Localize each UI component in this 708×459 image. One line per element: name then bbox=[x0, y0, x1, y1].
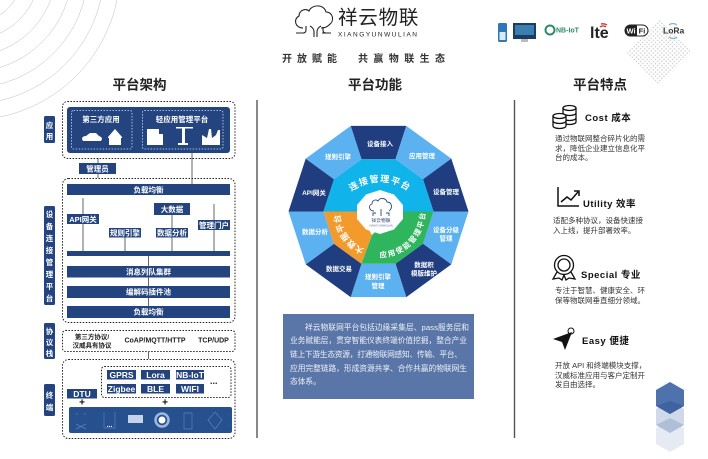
sector labels: API网关 bbox=[302, 188, 326, 197]
curved label: big data platform: 大数据平台 bbox=[333, 216, 364, 254]
admin tag bbox=[79, 163, 116, 174]
icon: phone bbox=[498, 23, 507, 42]
chart: function wheel bbox=[288, 126, 468, 298]
icon: line chart bbox=[558, 187, 579, 206]
sector labels: 规则引擎 bbox=[325, 152, 352, 161]
label: device management platform: 备 bbox=[46, 221, 54, 231]
curved label: connection platform: 连接管理平台 bbox=[348, 174, 410, 192]
label: protocol stack: 议 bbox=[46, 337, 54, 347]
load balancing lower: 负载均衡 bbox=[134, 306, 164, 316]
bus bar bbox=[67, 251, 230, 256]
center logo bbox=[357, 190, 403, 234]
tagline: 开放赋能 bbox=[282, 52, 342, 65]
segment: connection platform bbox=[324, 159, 434, 212]
title: Special 专业 bbox=[581, 269, 641, 281]
logo name: 祥云物联 bbox=[338, 7, 419, 29]
icon: factory bbox=[202, 129, 220, 145]
third-party protocols: 第三方协议/ bbox=[75, 332, 109, 341]
big data bbox=[154, 203, 190, 215]
tagline part two: 共赢物联生态 bbox=[358, 52, 450, 65]
GPRS: GPRS bbox=[109, 370, 134, 380]
plus right: + bbox=[162, 398, 168, 408]
message queue bbox=[67, 266, 230, 278]
text block: platform description: 祥云物联网平台包括边缘采集层、pass服务层和 bbox=[305, 322, 469, 332]
ellipsis: ... bbox=[210, 376, 218, 386]
WIFI bbox=[176, 384, 204, 394]
load balancing lower bbox=[67, 306, 230, 318]
sector labels: 应用管理 bbox=[409, 151, 436, 160]
third party applications: 第三方应用 bbox=[82, 114, 120, 124]
center logo: XIANGYUNWULIAN bbox=[369, 224, 393, 228]
text block: platform description: 链上下游生态资源，打通物联网感知、传输、平台、 bbox=[290, 349, 462, 359]
body: 适配多种协议，设备快速接 bbox=[553, 215, 643, 225]
api gateway: API网关 bbox=[69, 214, 97, 224]
admin tag: 管理员 bbox=[86, 164, 109, 174]
label: terminal: 端 bbox=[46, 402, 54, 412]
sector labels: 设备接入 bbox=[367, 139, 394, 148]
panel: cost bbox=[553, 106, 645, 162]
label: device management platform: 平 bbox=[46, 282, 54, 291]
body: 专注于智慧、健康安全、环 bbox=[555, 285, 645, 295]
body: 台的成本。 bbox=[555, 152, 592, 162]
icon: WiFi bbox=[625, 25, 648, 36]
label: application: 用 bbox=[46, 132, 53, 141]
coap protocols: CoAP/MQTT/HTTP bbox=[124, 338, 186, 344]
rule engine: 规则引擎 bbox=[110, 228, 140, 238]
DTU: DTU bbox=[73, 389, 91, 399]
text block: platform description: 业务赋能层，贯穿智能仪表终端价值挖掘，整合产业 bbox=[290, 335, 467, 345]
panel: device platform bbox=[62, 178, 235, 322]
sector labels bbox=[302, 139, 460, 290]
light application platform bbox=[142, 110, 223, 149]
icon: LoRa bbox=[663, 23, 685, 39]
label: device management platform: 管 bbox=[46, 257, 54, 267]
light application platform: 轻应用管理平台 bbox=[156, 114, 209, 124]
icon: WiFi: Wi bbox=[626, 26, 636, 36]
icon: award bbox=[553, 256, 575, 280]
body: 求，降低企业建立信息化平 bbox=[555, 143, 645, 153]
label: terminal bbox=[44, 384, 55, 416]
big data: 大数据 bbox=[161, 204, 184, 214]
codec pool bbox=[67, 286, 230, 298]
icon: crane bbox=[176, 127, 193, 145]
decorative hexagons bbox=[656, 382, 684, 452]
outer ring sectors bbox=[288, 126, 468, 297]
sector labels: 管理 bbox=[372, 281, 385, 290]
text block: platform description: 态体系。 bbox=[290, 376, 321, 386]
title: Cost 成本 bbox=[585, 112, 631, 124]
panel: utility bbox=[553, 187, 643, 235]
technology icons bbox=[498, 23, 685, 42]
panel: application layer bbox=[62, 102, 235, 158]
icon: LoRa: LoRa bbox=[663, 26, 685, 36]
heading: architecture: 平台架构 bbox=[112, 76, 166, 92]
icon: NB-IoT bbox=[546, 26, 580, 34]
BLE: BLE bbox=[147, 384, 164, 394]
label: application bbox=[44, 116, 55, 143]
icon: car bbox=[82, 133, 102, 141]
device strip bbox=[69, 407, 232, 433]
label: device management platform: 理 bbox=[46, 270, 54, 279]
body: 开放 API 和终端模块支撑， bbox=[555, 360, 646, 370]
icon: database coins bbox=[553, 106, 576, 128]
sector labels: 数据分析 bbox=[302, 227, 328, 236]
label: terminal: 终 bbox=[46, 390, 54, 400]
plus left: + bbox=[79, 398, 85, 408]
admin portal: 管理门户 bbox=[199, 220, 229, 230]
sector labels: 模版维护 bbox=[411, 268, 438, 278]
device strip: ... bbox=[107, 422, 112, 429]
icon: paper plane bbox=[553, 328, 574, 350]
load balancing: 负载均衡 bbox=[134, 184, 164, 194]
load balancing bbox=[67, 184, 230, 195]
sector labels: 规则引擎 bbox=[365, 272, 392, 281]
label: device management platform: 台 bbox=[46, 293, 54, 303]
panel: architecture bbox=[44, 102, 235, 438]
title: Utility 效率 bbox=[583, 198, 636, 210]
panel: special bbox=[553, 256, 645, 305]
title: Easy 便捷 bbox=[582, 335, 629, 347]
icon: monitor bbox=[513, 23, 536, 42]
segment: application bbox=[362, 212, 434, 264]
label: device management platform: 设 bbox=[46, 209, 54, 219]
curved label: application platform: 应用使能管理平台 bbox=[380, 213, 426, 258]
label: device management platform bbox=[44, 206, 55, 305]
text block: platform description bbox=[283, 314, 474, 399]
Lora bbox=[141, 370, 170, 380]
label: device management platform: 接 bbox=[46, 245, 54, 255]
sector labels: 设备分级 bbox=[433, 225, 460, 234]
body: 通过物联网整合碎片化的需 bbox=[555, 133, 645, 143]
BLE bbox=[141, 384, 170, 394]
NB-IoT: NB-IoT bbox=[176, 370, 205, 380]
label: protocol stack: 栈 bbox=[46, 348, 54, 358]
icon: cloud tree bbox=[296, 6, 333, 37]
icon: NB-IoT: NB-IoT bbox=[556, 28, 580, 34]
WIFI: WIFI bbox=[181, 384, 199, 394]
center logo: 祥云物联 bbox=[371, 217, 391, 224]
sector labels: 设备管理 bbox=[433, 187, 460, 196]
message queue: 消息列队集群 bbox=[126, 266, 171, 276]
heading: functions: 平台功能 bbox=[348, 76, 402, 92]
icon: LTE: lte bbox=[590, 25, 609, 42]
third-party protocols: 汉威具有协议 bbox=[72, 340, 112, 350]
panel: protocols bbox=[62, 330, 235, 352]
logo pinyin: XIANGYUNWULIAN bbox=[338, 32, 417, 38]
label: protocol stack bbox=[44, 323, 55, 359]
body: 入上线，提升部署效率。 bbox=[553, 225, 636, 235]
body: 保等物联网垂直细分领域。 bbox=[555, 295, 645, 305]
header logo bbox=[296, 6, 419, 39]
label: application: 应 bbox=[46, 120, 54, 130]
icon: house bbox=[108, 129, 122, 145]
panel: terminals bbox=[62, 360, 235, 438]
sector labels: 数据积 bbox=[414, 260, 434, 269]
text block: platform description: 应用完整链路，形成资源共享、合作共赢的物联网生 bbox=[290, 363, 467, 373]
body: 发自由选择。 bbox=[555, 379, 600, 389]
codec pool: 编解码插件池 bbox=[126, 286, 171, 296]
tcp protocols: TCP/UDP bbox=[198, 338, 229, 344]
DTU bbox=[67, 389, 97, 399]
panel: easy bbox=[553, 328, 646, 389]
icon: building bbox=[147, 129, 163, 145]
body: 汉威标准应用与客户定制开 bbox=[555, 370, 645, 380]
label: device management platform: 连 bbox=[46, 233, 54, 243]
sector labels: 数据交易 bbox=[326, 264, 352, 273]
icon: WiFi: Fi bbox=[639, 26, 645, 36]
heading: features: 平台特点 bbox=[573, 76, 627, 92]
third party applications bbox=[72, 110, 132, 149]
label: protocol stack: 协 bbox=[46, 326, 54, 336]
Lora: Lora bbox=[146, 370, 165, 380]
sector labels: 管理 bbox=[440, 234, 453, 242]
segment: big data bbox=[324, 212, 372, 264]
data analysis: 数据分析 bbox=[157, 228, 187, 238]
Zigbee: Zigbee bbox=[108, 384, 135, 394]
